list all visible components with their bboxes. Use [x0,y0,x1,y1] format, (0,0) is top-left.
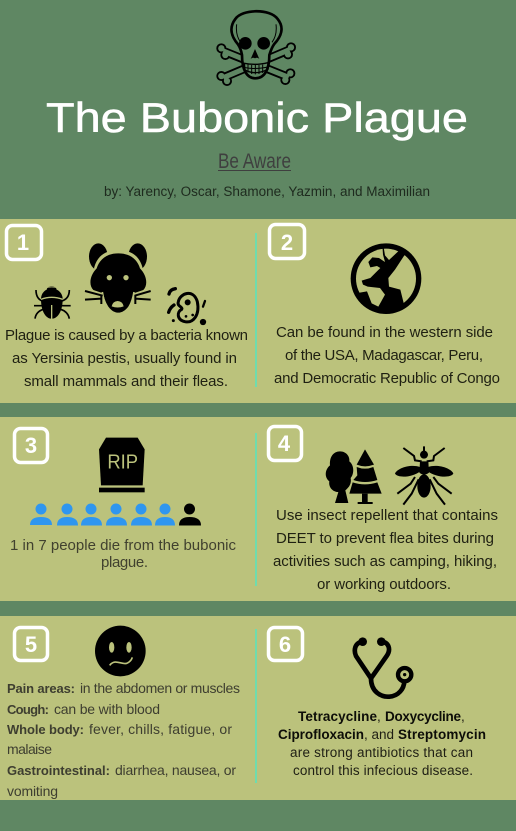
panel 5 symptoms list: fever, chills, fatigue, or [89,721,232,737]
panel 6 text: control this infecious disease. [293,763,473,778]
panel 5 number: 5 [25,632,37,657]
panel 6 number [268,628,302,660]
panel 3 number [14,428,48,462]
panel 6 text: Doxycycline [385,709,461,724]
panel 5 symptoms list: Whole body: [7,722,84,737]
panel 6 text: Streptomycin [398,727,486,742]
panel 4 text: activities such as camping, hiking, [273,553,497,570]
panel 5 number [14,628,48,660]
panel 4 text [273,507,498,593]
panel: row 3 [0,616,516,800]
icon: sick face [95,626,146,676]
icon: tombstone: RIP [107,450,138,473]
panel: row 1 [0,219,516,403]
panel 1 text [5,327,248,390]
icon: skull and crossbones [216,11,296,86]
panel 2 text [274,324,500,387]
panel 2 text: Can be found in the western side [276,324,493,341]
panel: row 2 [0,417,516,601]
icon: mosquito [395,446,453,505]
panel 4 text: Use insect repellent that contains [276,507,498,524]
panel 6 text: , [461,709,465,724]
panel 3 text [10,537,236,571]
icon: globe [348,243,425,314]
panel 3 text: 1 in 7 people die from the bubonic [10,537,236,554]
panel 6 text: , and [364,727,394,742]
panel 6 text [278,709,486,778]
panel 6 text: Tetracycline [298,709,377,724]
panel 3 text: plague. [101,554,148,571]
panel 5 symptoms list: diarrhea, nausea, or [115,762,236,778]
panel 5 symptoms list [7,680,240,799]
icon: flea beetle [34,286,71,319]
panel 2 number: 2 [281,230,293,255]
panel 1 number [6,226,42,260]
panel 4 number [268,426,302,460]
panel 5 symptoms list: can be with blood [54,701,160,717]
panel 4 number: 4 [278,431,291,456]
panel 4 text: DEET to prevent flea bites during [276,530,494,547]
icon: bacteria [169,289,206,325]
icon: rat [85,243,151,313]
subtitle: Be Aware [218,150,291,173]
panel 2 text: and Democratic Republic of Congo [274,370,500,387]
panel 3 number: 3 [25,433,37,458]
panel 5 symptoms list: Cough: [7,702,49,717]
panel 2 text: of the USA, Madagascar, Peru, [285,347,483,364]
panel 1 text: small mammals and their fleas. [24,373,228,390]
icon: trees [326,449,382,504]
title: The Bubonic Plague [46,94,468,141]
panel 6 text: Ciprofloxacin [278,727,364,742]
panel 5 symptoms list: malaise [7,741,52,757]
panel 4 text: or working outdoors. [317,576,451,593]
panel 6 text: , [377,709,381,724]
panel 6 number: 6 [279,632,291,657]
panel 1 text: as Yersinia pestis, usually found in [12,350,237,367]
panel 1 text: Plague is caused by a bacteria known [5,327,248,344]
panel 1 number: 1 [17,230,29,255]
pictogram: 1 in 7 people [30,504,201,526]
panel 5 symptoms list: Pain areas: [7,681,75,696]
icon: tombstone [99,438,145,492]
panel 5 symptoms list: vomiting [7,783,58,799]
panel 6 text: are strong antibiotics that can [290,745,473,760]
authors: by: Yarency, Oscar, Shamone, Yazmin, and Maximilian [104,184,430,199]
panel 5 symptoms list: in the abdomen or muscles [80,680,240,696]
panel 5 symptoms list: Gastrointestinal: [7,763,110,778]
icon: stethoscope [355,637,411,697]
panel 2 number [270,224,304,258]
